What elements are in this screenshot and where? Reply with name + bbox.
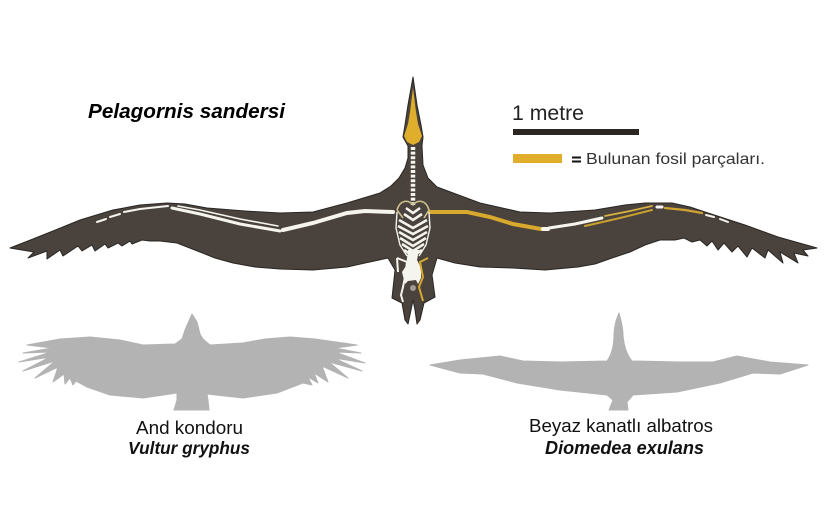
label: Beyaz kanatlı albatros: Beyaz kanatlı albatros xyxy=(529,415,713,436)
label: And kondoru xyxy=(128,417,250,458)
silhouette: Andean condor xyxy=(19,314,365,410)
wishbone xyxy=(397,201,429,218)
ribcage xyxy=(396,208,430,256)
pelvis and leg bones xyxy=(397,250,428,302)
skull and beak (yellow fossil) xyxy=(404,88,422,145)
label: Diomedea exulans: Diomedea exulans xyxy=(545,438,704,458)
neck vertebrae xyxy=(411,147,415,205)
label: Vultur gryphus: Vultur gryphus xyxy=(128,438,250,458)
scale bar: 1 metre xyxy=(512,102,639,135)
label: And kondoru: And kondoru xyxy=(136,417,243,438)
silhouette: wandering albatross xyxy=(430,313,808,410)
scale bar: 1 metre: 1 metre xyxy=(512,102,584,125)
main figure: Pelagornis sandersi silhouette with skeleton xyxy=(10,77,817,324)
legend: found fossil pieces xyxy=(513,151,765,168)
legend: found fossil pieces: Bulunan fosil parçaları. xyxy=(586,151,765,168)
silhouette: Pelagornis body and wings xyxy=(10,77,817,324)
left wing bones (white) xyxy=(97,206,393,231)
title: Pelagornis sandersi: Pelagornis sandersi xyxy=(88,100,286,123)
label: Beyaz kanatlı albatros xyxy=(529,415,713,458)
right wing bones (yellow fossil) xyxy=(430,206,728,229)
